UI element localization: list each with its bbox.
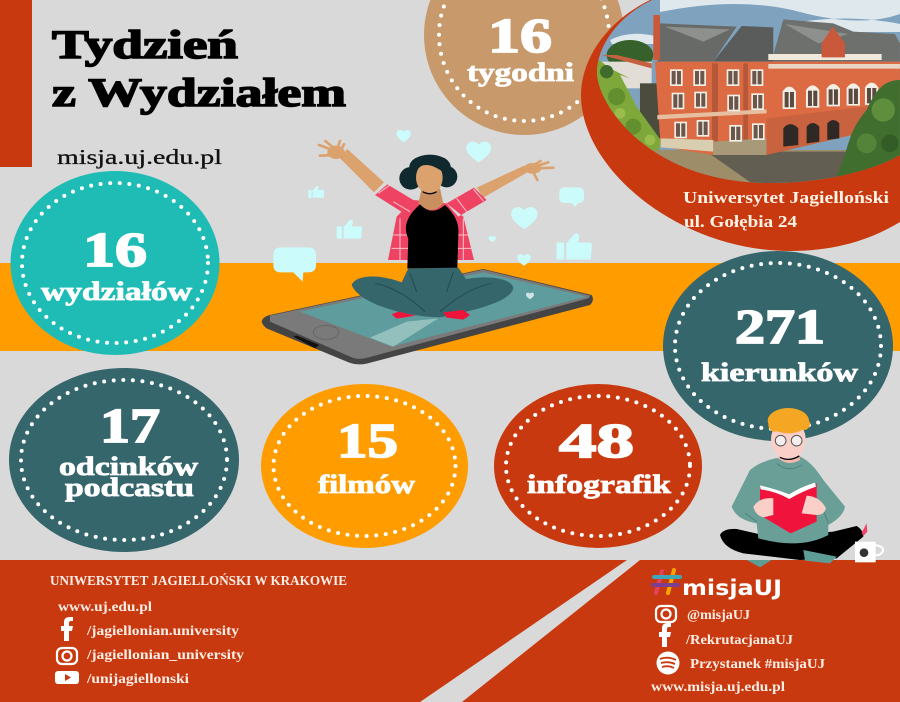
stat: 17 odcinków podcastu <box>9 368 239 552</box>
stat: 17 odcinków podcastu: odcinków <box>59 452 198 481</box>
stat: 48 infografik: 48 <box>559 413 634 468</box>
footer: misjaUJ links <box>651 570 825 694</box>
logo: hashtag <box>653 570 680 593</box>
icon: instagram <box>656 606 676 622</box>
stat: 15 filmów: 15 <box>337 413 398 468</box>
diagonal stripe <box>420 560 640 702</box>
title: Tydzień <box>52 22 238 67</box>
cup with steam <box>855 523 883 562</box>
red photo shape <box>581 0 900 251</box>
footer: misjaUJ links: /RekrutacjanaUJ <box>685 632 793 647</box>
stat: 16 wydziałów: 16 <box>83 222 147 277</box>
icon: facebook <box>659 623 671 647</box>
footer: misjaUJ links: www.misja.uj.edu.pl <box>651 679 785 694</box>
stat: 271 kierunków <box>663 251 893 441</box>
stat: 15 filmów <box>261 384 468 548</box>
hands <box>753 496 826 517</box>
stat: 16 tygodni: tygodni <box>467 58 574 87</box>
footer: university links: /jagiellonian.university <box>86 623 239 638</box>
footer: misjaUJ links: Przystanek #misjaUJ <box>690 656 825 671</box>
illustration: woman on phone <box>262 130 593 364</box>
footer: university links: UNIWERSYTET JAGIELLOŃSKI W KRAKOWIE <box>50 573 347 588</box>
stat: 16 wydziałów <box>10 171 220 355</box>
footer: misjaUJ links: @misjaUJ <box>687 607 750 622</box>
icon: instagram <box>57 648 77 664</box>
logo: misjaUJ wordmark: misjaUJ <box>682 576 782 600</box>
stat: 16 tygodni <box>424 0 624 135</box>
shirt <box>375 184 487 260</box>
glasses <box>775 435 802 446</box>
stat: 16 tygodni: 16 <box>488 8 552 63</box>
footer: university links: /jagiellonian_university <box>86 647 244 662</box>
footer background <box>0 560 900 702</box>
title: z Wydziałem <box>52 70 346 115</box>
hair <box>399 155 457 190</box>
stat: 48 infografik: infografik <box>527 470 672 499</box>
icon: youtube <box>55 671 79 684</box>
icon: spotify <box>656 652 680 674</box>
stat: 271 kierunków: 271 <box>735 299 825 354</box>
stat: 48 infografik <box>494 384 702 548</box>
footer: university links <box>50 573 347 686</box>
red corner block <box>0 0 32 167</box>
book <box>760 483 817 533</box>
orange band <box>0 263 900 351</box>
hair <box>768 408 810 433</box>
legs <box>720 526 863 560</box>
title <box>52 22 346 115</box>
photo caption <box>683 188 889 231</box>
stat: 17 odcinków podcastu: podcastu <box>65 473 194 502</box>
icon: facebook <box>61 617 73 641</box>
sweater <box>732 457 845 543</box>
icons: hearts, thumbs and speech bubbles <box>273 130 592 282</box>
neck and face <box>416 160 443 210</box>
black top <box>406 204 458 268</box>
socks <box>747 550 837 567</box>
head <box>778 447 800 463</box>
photo: university building <box>587 0 900 190</box>
footer: university links: www.uj.edu.pl <box>58 599 152 614</box>
phone <box>262 269 593 364</box>
photo caption: Uniwersytet Jagielloński <box>683 188 889 207</box>
photo caption: ul. Gołębia 24 <box>684 212 798 231</box>
legs <box>352 268 513 317</box>
socks <box>392 310 470 320</box>
footer: university links: /unijagiellonski <box>86 671 189 686</box>
arms and hands <box>319 141 553 198</box>
stat: 15 filmów: filmów <box>318 470 415 499</box>
illustration: man reading <box>720 408 883 567</box>
stat: 271 kierunków: kierunków <box>701 358 858 387</box>
stat: 16 wydziałów: wydziałów <box>41 277 192 306</box>
website address: misja.uj.edu.pl <box>57 145 222 169</box>
stat: 17 odcinków podcastu: 17 <box>100 398 160 453</box>
